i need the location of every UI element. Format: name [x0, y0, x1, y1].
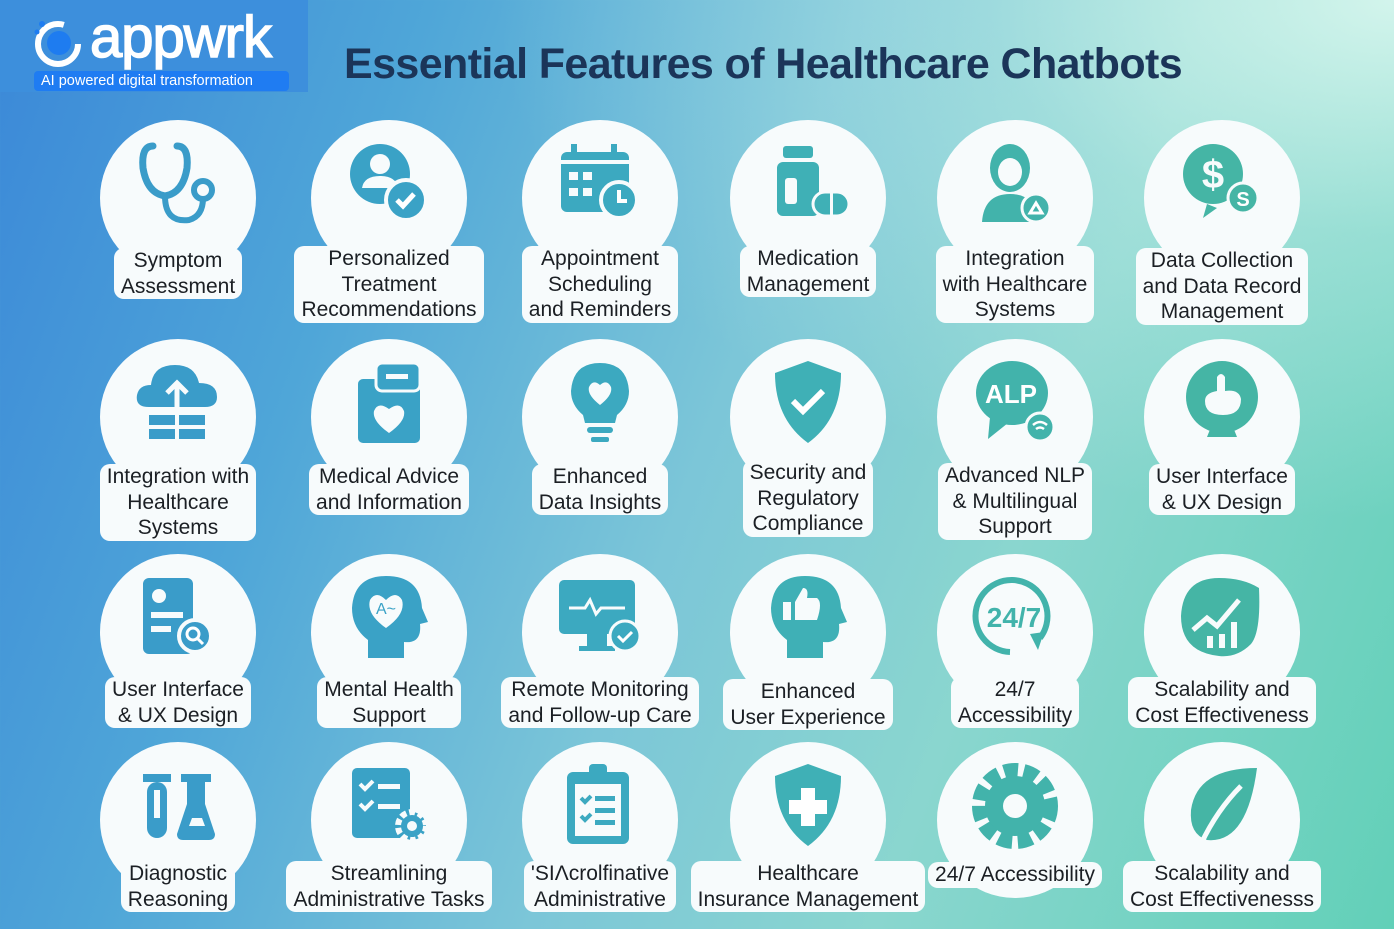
- logo: [0, 0, 308, 92]
- card: Scalability and Cost Effectivenesss: [1123, 742, 1321, 912]
- card: Mental Health Support: A~: [376, 601, 396, 618]
- card: 24/7 Accessibility: Accessibility: [958, 704, 1072, 726]
- card: Integration with Healthcare Systems: Systems: [975, 298, 1055, 321]
- card: Integration with Healthcare Systems: Integration: [965, 247, 1065, 270]
- card: Appointment Scheduling: Scheduling: [548, 272, 652, 296]
- card: Enhanced Data Insights: [522, 339, 678, 515]
- card: User Interface: User Interface: [1156, 465, 1288, 488]
- card: Administrative: Administrative: [534, 888, 666, 910]
- card: Medication Management: Management: [747, 272, 869, 296]
- card: Medical Advice: [309, 339, 469, 515]
- card: Healthcare Insurance Management: Healthcare: [757, 862, 859, 885]
- card: Personalized Treatment: Treatment: [342, 272, 436, 296]
- card: Remote Monitoring: Remote Monitoring: [511, 678, 689, 701]
- card: Symptom Assessment: [100, 120, 256, 299]
- card: Personalized Treatment: [294, 120, 484, 323]
- card: Security: Compliance: [753, 512, 863, 535]
- card: Diagnostic Reasoning: [100, 742, 256, 912]
- card: Integration with Healthcare Systems 2: [100, 339, 256, 541]
- card: Enhanced User Experience: [723, 554, 893, 730]
- card: Healthcare Insurance Management: [691, 742, 925, 912]
- card: 24/7 Accessibility 2: [928, 742, 1102, 898]
- card: User Interface: [1144, 339, 1300, 515]
- tagline: [34, 71, 289, 91]
- card: Mental Health Support: Mental Health: [324, 678, 454, 701]
- card: Personalized Treatment: Recommendations: [301, 298, 477, 321]
- card: Appointment Scheduling: Appointment: [541, 247, 659, 270]
- card: Data Collection: [1136, 120, 1308, 325]
- card: Streamlining Administrative Tasks: Administrative Tasks: [293, 888, 484, 910]
- card: Personalized Treatment: Personalized: [328, 247, 450, 270]
- card: User Interface UX Design: & UX Design: [118, 704, 238, 726]
- card: Data Collection: Data Collection: [1151, 249, 1293, 272]
- card: Data Collection: and Data Record: [1143, 274, 1301, 298]
- card: Medical Advice: and Information: [316, 490, 462, 514]
- card: Integration with Healthcare Systems: with Healthcare: [943, 272, 1087, 296]
- card: Scalability: Cost Effectiveness: [1135, 704, 1309, 726]
- tagline: AI powered digital transformation: [41, 73, 253, 89]
- card: Streamlining Administrative Tasks: [286, 742, 492, 912]
- card: Diagnostic Reasoning: Reasoning: [128, 888, 228, 910]
- card: Advanced NLP: Advanced NLP: [945, 464, 1085, 487]
- card: Advanced NLP: Support: [978, 515, 1052, 538]
- card: 24/7 Accessibility: 24/7: [987, 602, 1041, 633]
- card: Enhanced Data Insights: Enhanced: [553, 465, 647, 488]
- card: Integration with Healthcare Systems: [936, 120, 1094, 323]
- card: Medication Management: Medication: [757, 247, 859, 270]
- title: Essential Features of Healthcare Chatbots: [344, 40, 1182, 88]
- card: Data Collection: $: [1202, 153, 1224, 197]
- card: Scalability: Scalability and: [1154, 678, 1290, 701]
- card: Scalability and Cost Effectivenesss: Scalability and: [1154, 862, 1290, 885]
- card: Remote Monitoring: and Follow-up Care: [508, 704, 692, 726]
- card: User Interface: & UX Design: [1162, 490, 1282, 514]
- card: Advanced NLP: [937, 339, 1093, 540]
- card: Scalability: [1128, 554, 1316, 728]
- card: Enhanced Data Insights: Data Insights: [539, 490, 661, 514]
- card: Symptom Assessment: Symptom: [134, 249, 222, 272]
- card: Medical Advice: Medical Advice: [319, 465, 459, 488]
- card: Administrative: [522, 742, 678, 912]
- card: Appointment Scheduling: and Reminders: [529, 298, 671, 321]
- card: Data Collection: S: [1236, 189, 1250, 211]
- card: Enhanced User Experience: Enhanced: [761, 680, 855, 703]
- card: Integration with Healthcare Systems 2: Healthcare: [127, 490, 229, 514]
- card: Integration with Healthcare Systems 2: Systems: [138, 516, 218, 539]
- card: 24/7 Accessibility: 24/7: [995, 678, 1035, 701]
- card: Data Collection: Management: [1161, 300, 1283, 323]
- logo text: appwrk: [90, 5, 271, 70]
- card: Administrative: 'SΙΛcrolfinative: [531, 862, 669, 885]
- card: Integration with Healthcare Systems 2: Integration with: [107, 465, 249, 488]
- card: Scalability and Cost Effectivenesss: Cost Effectivenesss: [1130, 888, 1314, 910]
- card: Mental Health Support: Support: [352, 704, 426, 726]
- card: Medication Management: [730, 120, 886, 297]
- card: Diagnostic Reasoning: Diagnostic: [129, 862, 227, 885]
- card: Appointment Scheduling: [522, 120, 678, 323]
- card: Security: [730, 339, 886, 537]
- card: 24/7 Accessibility: [937, 554, 1093, 728]
- card: User Interface UX Design: [100, 554, 256, 728]
- card: Streamlining Administrative Tasks: Streamlining: [331, 862, 447, 885]
- card: Security: Regulatory: [757, 486, 859, 510]
- card: Advanced NLP: & Multilingual: [953, 490, 1077, 512]
- card: Symptom Assessment: Assessment: [121, 274, 235, 298]
- card: 24/7 Accessibility 2: 24/7 Accessibility: [935, 863, 1095, 886]
- card: Security: Security and: [750, 461, 866, 484]
- card: Advanced NLP: ALP: [985, 379, 1037, 409]
- card: Remote Monitoring: [501, 554, 699, 728]
- card: Mental Health Support: [311, 554, 467, 728]
- card: Enhanced User Experience: User Experience: [730, 706, 886, 728]
- card: Healthcare Insurance Management: Insurance Management: [698, 888, 918, 910]
- logo mark: [34, 21, 81, 67]
- card: User Interface UX Design: User Interface: [112, 678, 244, 701]
